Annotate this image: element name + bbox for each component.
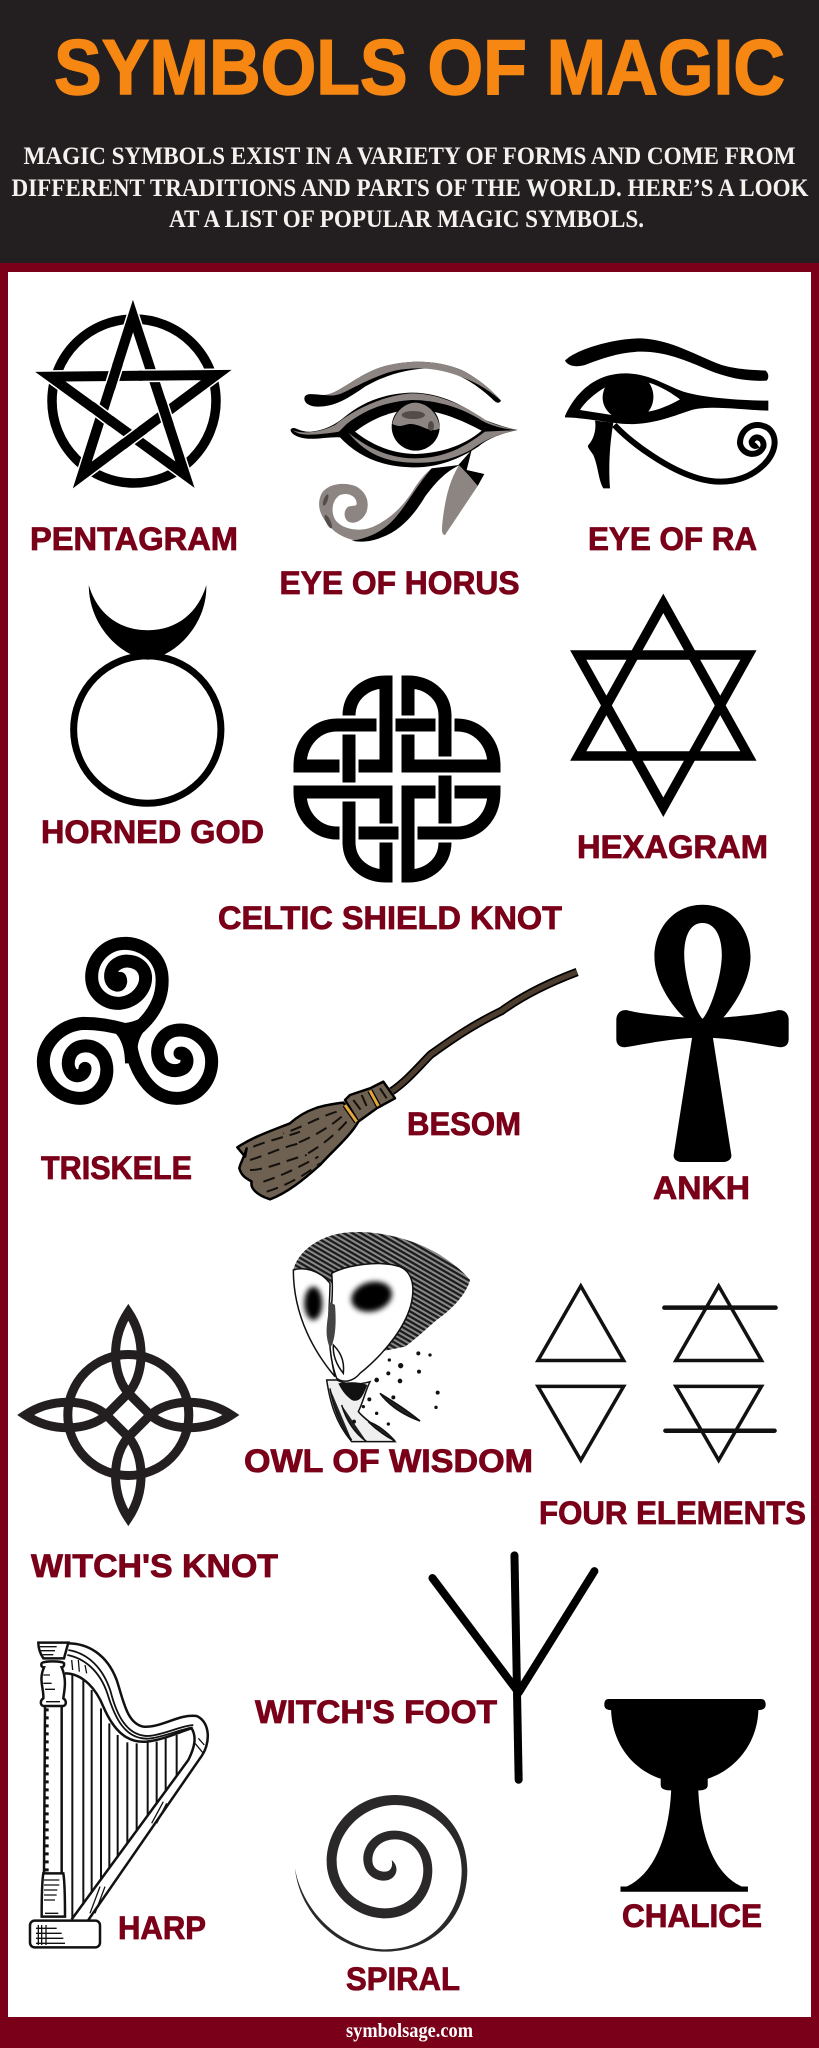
icon: triskele <box>43 943 212 1098</box>
intro text <box>12 143 809 233</box>
footer credit: symbolsage.com <box>346 2020 473 2042</box>
icon: horned god <box>74 585 221 803</box>
label: witch's foot: WITCH'S FOOT <box>255 1694 497 1730</box>
label: triskele: TRISKELE <box>41 1150 192 1186</box>
label: besom: BESOM <box>407 1106 521 1142</box>
icon: hexagram <box>578 603 748 807</box>
header panel <box>0 0 819 263</box>
icon: eye of horus <box>291 362 518 542</box>
icon: witch's foot <box>432 1555 594 1780</box>
icon: eye of ra <box>565 338 775 488</box>
icon: chalice <box>604 1699 766 1892</box>
icon: celtic shield knot <box>300 682 494 876</box>
label: ankh: ANKH <box>653 1170 750 1206</box>
icon: witch's knot <box>25 1312 231 1518</box>
label: spiral: SPIRAL <box>346 1961 460 1997</box>
icon: spiral <box>295 1795 467 1952</box>
icon: owl of wisdom <box>293 1232 470 1442</box>
label: horned god: HORNED GOD <box>41 814 264 850</box>
icon: pentagram <box>50 316 216 483</box>
icon: harp <box>30 1643 208 1947</box>
label: pentagram: PENTAGRAM <box>30 521 238 557</box>
icon: ankh <box>616 905 789 1162</box>
label: four elements: FOUR ELEMENTS <box>539 1495 806 1531</box>
label: celtic shield knot: CELTIC SHIELD KNOT <box>218 900 562 936</box>
label: eye of horus: EYE OF HORUS <box>280 565 520 601</box>
label: owl of wisdom: OWL OF WISDOM <box>244 1443 533 1479</box>
label: witch's knot: WITCH'S KNOT <box>31 1548 278 1584</box>
intro text: AT A LIST OF POPULAR MAGIC SYMBOLS. <box>169 206 644 233</box>
label: hexagram: HEXAGRAM <box>577 829 768 865</box>
icon: four elements <box>538 1286 776 1460</box>
label: chalice: CHALICE <box>622 1898 762 1934</box>
label: harp: HARP <box>118 1910 206 1946</box>
label: eye of ra: EYE OF RA <box>588 521 757 557</box>
icon: besom broom <box>237 972 577 1199</box>
